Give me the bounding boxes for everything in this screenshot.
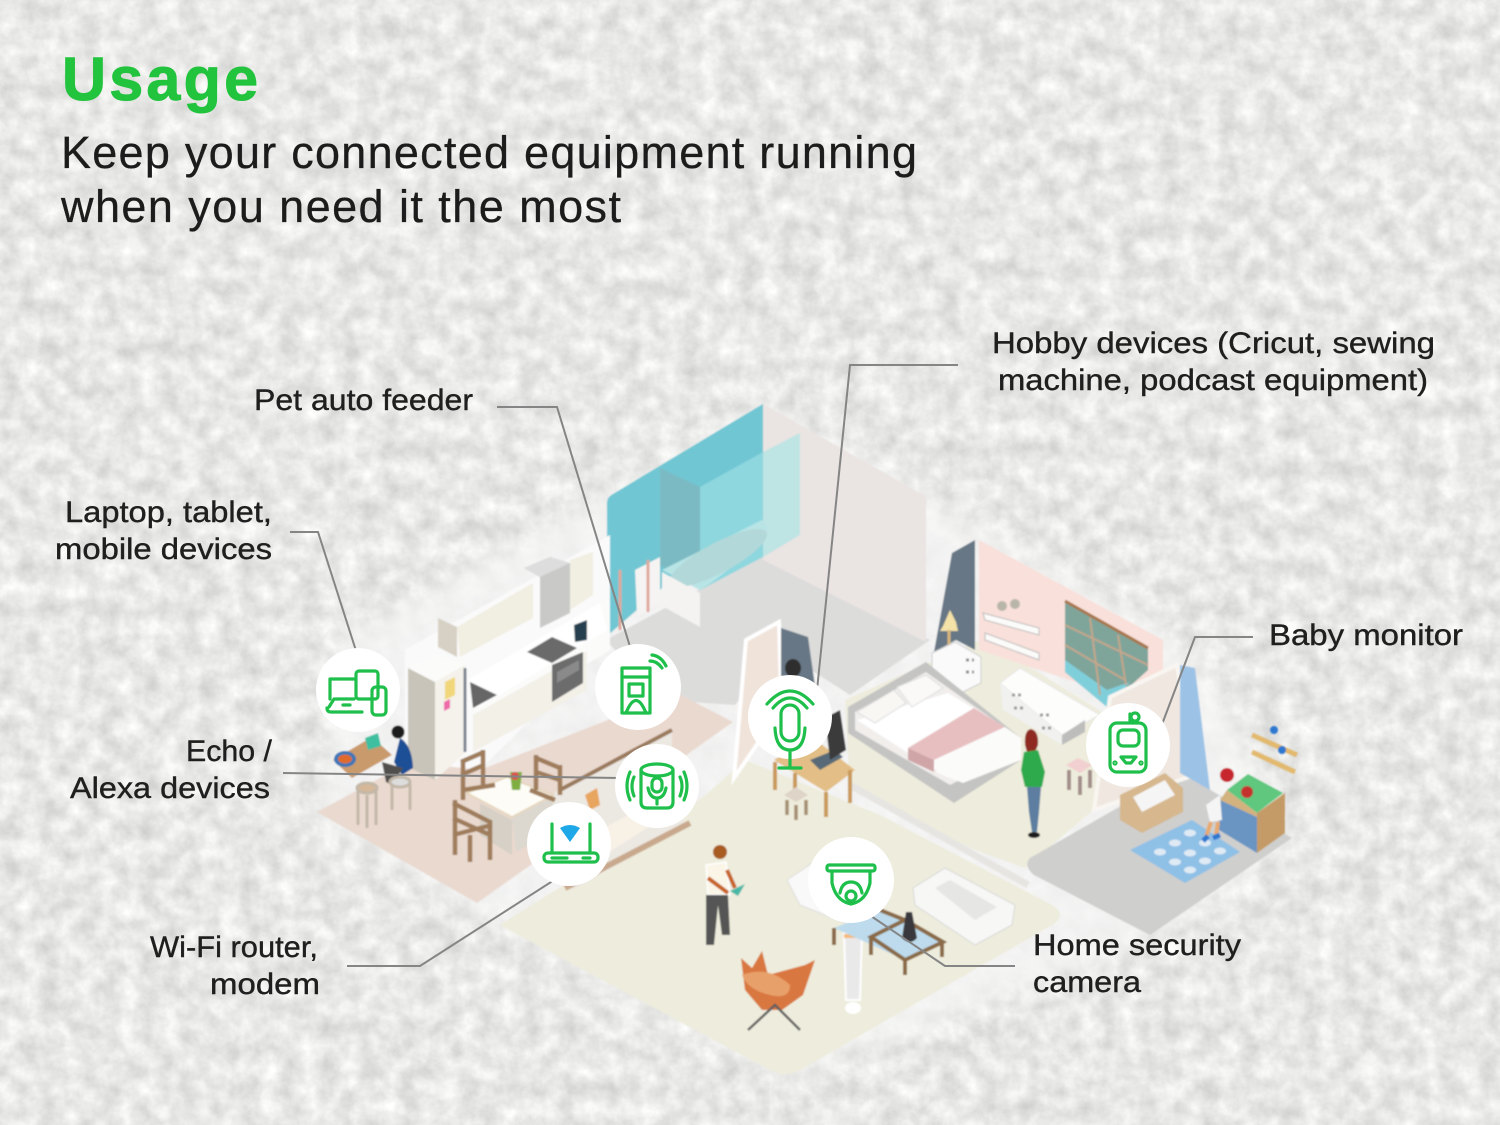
room dividers (850, 785, 1028, 885)
label: wi-fi router, modem (150, 931, 320, 1001)
coffee table (834, 910, 943, 975)
kitchen cabinets and appliances (408, 552, 610, 780)
icon: wi-fi router badge (527, 802, 611, 886)
dining table and chairs (453, 750, 560, 862)
label: hobby devices (992, 327, 1435, 397)
label: echo alexa devices: Echo / (186, 735, 273, 768)
subtitle: when you need it the most (60, 181, 621, 232)
icon: pet feeder badge (595, 644, 681, 730)
icon: baby monitor badge (1086, 703, 1170, 787)
floor lamp (844, 933, 862, 1014)
label: wi-fi router, modem: modem (210, 968, 320, 1001)
bed and dressers (848, 642, 1100, 803)
icon: smart speaker badge (615, 744, 699, 828)
label: home security camera: Home security (1033, 929, 1241, 962)
icon: security camera badge (808, 837, 894, 923)
room: bathroom (606, 404, 930, 705)
orange armchair (741, 951, 815, 1030)
small wall and hobby desk (734, 622, 855, 820)
label: echo alexa devices: Alexa devices (70, 772, 270, 805)
title: Usage (62, 45, 258, 113)
room: baby room (1027, 665, 1297, 935)
room: bedroom floor (845, 640, 1115, 868)
white sofas (787, 858, 1015, 945)
man standing with tablet (706, 845, 745, 945)
label: home security camera (1033, 929, 1241, 999)
label: hobby devices: machine, podcast equipment) (998, 364, 1428, 397)
label: home security camera: camera (1033, 966, 1141, 999)
label: laptop, tablet, mobile devices (55, 496, 272, 566)
woman standing (1021, 729, 1045, 838)
label: baby monitor: Baby monitor (1269, 619, 1463, 652)
icon: laptop and tablet badge (316, 648, 400, 732)
room: living floor (500, 780, 1060, 1074)
isometric home illustration (317, 404, 1297, 1075)
label: laptop, tablet, mobile devices: mobile devices (55, 533, 272, 566)
sofa back partition (535, 728, 690, 890)
white halo behind house (320, 410, 1290, 1075)
label: hobby devices: Hobby devices (Cricut, sewing (992, 327, 1435, 360)
subtitle (60, 127, 917, 232)
icon: microphone badge (748, 675, 832, 768)
kitchen back wall (405, 535, 610, 770)
leader lines (283, 365, 1253, 966)
label: pet auto feeder: Pet auto feeder (254, 384, 473, 417)
room: kitchen floor (317, 693, 733, 903)
label: wi-fi router, modem: Wi-Fi router, (150, 931, 318, 964)
person at kitchen bar (333, 726, 413, 828)
label: laptop, tablet, mobile devices: Laptop, tablet, (65, 496, 272, 529)
bedroom wall and window (934, 540, 1163, 707)
label: echo alexa devices (70, 735, 273, 805)
pink stool (1066, 758, 1092, 795)
subtitle: Keep your connected equipment running (61, 127, 917, 178)
